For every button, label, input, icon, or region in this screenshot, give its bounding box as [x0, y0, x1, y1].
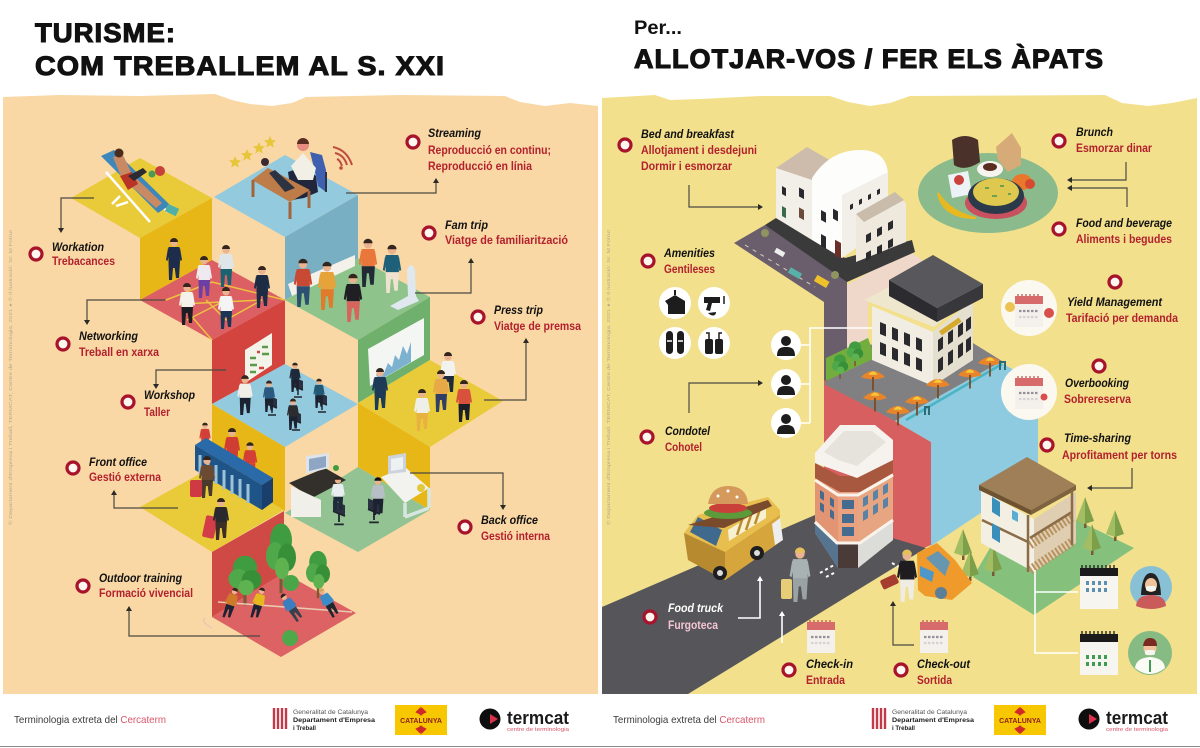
footer: left: CATALUNYA: [400, 718, 442, 725]
label: Time-sharing: Aprofitament per torns: [1062, 450, 1177, 462]
label: Yield Management: Yield Management: [1067, 297, 1163, 309]
illustration: condotel occupants: [771, 328, 872, 438]
label: Streaming: Streaming: [428, 128, 481, 140]
label: Condotel: [641, 426, 711, 454]
footer: right: i Treball: [892, 725, 915, 732]
footer: right: CATALUNYA: [999, 718, 1041, 725]
label: Check-out: Sortida: [917, 675, 953, 687]
label: Brunch: Esmorzar dinar: [1076, 143, 1152, 155]
footer: left: Terminologia extreta del Cercaterm: [14, 714, 166, 726]
illustration: fam trip group: [288, 239, 419, 322]
label: Front office: Gestió externa: [89, 472, 162, 484]
footer: left: centre de terminologia: [507, 727, 570, 733]
label: Amenities: Gentileses: [664, 264, 715, 276]
label: Time-sharing: Time-sharing: [1064, 433, 1131, 445]
illustration: front office reception: [190, 423, 273, 540]
illustration: hotel with terrace: [832, 255, 1005, 426]
footer: right: Departament d'Empresa: [892, 717, 974, 724]
illustration: workshop room: [237, 333, 327, 430]
illustration: amenities icons: [659, 287, 730, 359]
illustration: timeshare calendars and avatars: [1035, 565, 1172, 675]
label: Networking: [57, 331, 160, 359]
label: Food and beverage: Aliments i begudes: [1076, 234, 1172, 246]
label: Bed and breakfast: Dormir i esmorzar: [641, 161, 732, 173]
label: Press trip: Press trip: [494, 305, 543, 317]
label: Workation: Trebacances: [52, 256, 115, 268]
title: left: COM TREBALLEM AL S. XXI: [35, 51, 445, 81]
illustration: workation sunbed: [101, 148, 179, 222]
illustration: back office desks: [289, 453, 429, 524]
label: Brunch: [1053, 127, 1152, 155]
illustration: parked car: [917, 543, 972, 600]
panel: right background: [602, 95, 1197, 694]
footer: right: [613, 705, 1169, 735]
label: Workshop: Taller: [144, 407, 170, 419]
panel: left background: [3, 94, 598, 694]
credit: right vertical: © Departament d'Empresa i Treball, TERMCAT, Centre de Terminologia, 2021 ● © Il·lustració: Sr. M Fotrut: [605, 229, 612, 525]
footer: left: Generalitat de Catalunya: [293, 709, 368, 716]
label: Food truck: [644, 603, 724, 632]
label: Check-in: Entrada: [806, 675, 846, 687]
credit: left vertical: © Departament d'Empresa i Treball, TERMCAT, Centre de Terminologia, 2021 ● © Il·lustració: Sr. M Fotrut: [7, 229, 14, 525]
label: Back office: Gestió interna: [481, 531, 551, 543]
label: Outdoor training: Formació vivencial: [99, 588, 193, 600]
label: Back office: [459, 515, 551, 543]
label: Fam trip: [423, 220, 568, 247]
label: Back office: Back office: [481, 515, 539, 527]
illustration: streaming desk and presenter: [229, 136, 352, 219]
label: Overbooking: Sobrereserva: [1064, 394, 1132, 406]
footer: right: termcat: [1106, 708, 1168, 728]
label: Press trip: [472, 305, 582, 333]
label: Amenities: [642, 248, 715, 276]
label: Check-out: [895, 659, 971, 687]
illustration: bed and breakfast buildings: [761, 147, 915, 288]
road and walls: right panel: [602, 225, 1134, 694]
footer: left: Departament d'Empresa: [293, 717, 375, 724]
label: Food and beverage: [1053, 218, 1173, 246]
footer: left: [14, 705, 570, 735]
label: Workation: Workation: [52, 242, 104, 254]
label: Yield Management: Tarifació per demanda: [1066, 313, 1179, 325]
footer: left: i Treball: [293, 725, 316, 732]
label: Yield Management: [1066, 276, 1179, 325]
footer: right: Terminologia extreta del Cercaterm: [613, 714, 765, 726]
footer: right: centre de terminologia: [1106, 727, 1169, 733]
illustration: timeshare house: [954, 457, 1124, 581]
label: Workation: [30, 242, 115, 268]
illustration: yield management badge: [1001, 280, 1057, 336]
illustration: food truck: [684, 486, 783, 580]
label: Networking: Networking: [79, 331, 138, 343]
label: Bed and breakfast: [619, 129, 757, 173]
label: Workshop: Workshop: [144, 390, 195, 402]
label: Front office: Front office: [89, 457, 148, 469]
label: Streaming: [407, 128, 551, 173]
footer: left: termcat: [507, 708, 569, 728]
label: Front office: [67, 457, 162, 484]
label: Streaming: Reproducció en línia: [428, 161, 533, 173]
title: left: TURISME:: [35, 18, 176, 48]
label: Time-sharing: [1041, 433, 1177, 462]
illustration: brunch plate: [918, 133, 1058, 233]
arrows: left panel: [58, 178, 529, 636]
label: Food truck: Food truck: [668, 603, 724, 615]
label: Workshop: [122, 390, 195, 419]
illustration: outdoor training: [204, 523, 352, 646]
label: Check-in: Check-in: [806, 659, 853, 671]
label: Condotel: Condotel: [665, 426, 711, 438]
title: right: [634, 18, 1104, 74]
arrows: right panel: [689, 162, 1132, 645]
label: Networking: Treball en xarxa: [79, 347, 160, 359]
label: Food and beverage: Food and beverage: [1076, 218, 1173, 230]
label: Fam trip: Fam trip: [445, 220, 488, 232]
label: Overbooking: Overbooking: [1065, 378, 1129, 390]
label: Outdoor training: Outdoor training: [99, 573, 182, 585]
title: right: ALLOTJAR-VOS / FER ELS ÀPATS: [634, 43, 1104, 74]
label: Check-out: Check-out: [917, 659, 971, 671]
illustration: networking people: [166, 238, 285, 340]
label: Amenities: Amenities: [663, 248, 715, 260]
label: Streaming: Reproducció en continu;: [428, 145, 551, 157]
isometric block staircase: left: [71, 155, 503, 657]
footer: right: Generalitat de Catalunya: [892, 709, 967, 716]
label: Check-in: [783, 659, 853, 687]
label: Overbooking: [1064, 360, 1132, 406]
label: Bed and breakfast: Allotjament i desdejuni: [641, 145, 757, 157]
illustration: check-in calendar: [807, 620, 835, 653]
illustration: check-out calendar: [920, 620, 948, 653]
title: right: Per...: [634, 18, 682, 39]
label: Brunch: Brunch: [1076, 127, 1113, 139]
illustration: guest leaving: [880, 550, 917, 602]
label: Bed and breakfast: Bed and breakfast: [641, 129, 735, 141]
label: Press trip: Viatge de premsa: [494, 321, 582, 333]
illustration: overbooking badge: [1001, 364, 1057, 420]
label: Fam trip: Viatge de familiarització: [445, 235, 568, 247]
label: Condotel: Cohotel: [665, 442, 702, 454]
illustration: corner building: [815, 425, 893, 568]
label: Food truck: Furgoteca: [668, 620, 719, 632]
illustration: press trip screen and people: [368, 318, 472, 431]
illustration: guest with suitcase: [781, 547, 913, 602]
title: left: [35, 18, 445, 81]
label: Outdoor training: [77, 573, 193, 600]
